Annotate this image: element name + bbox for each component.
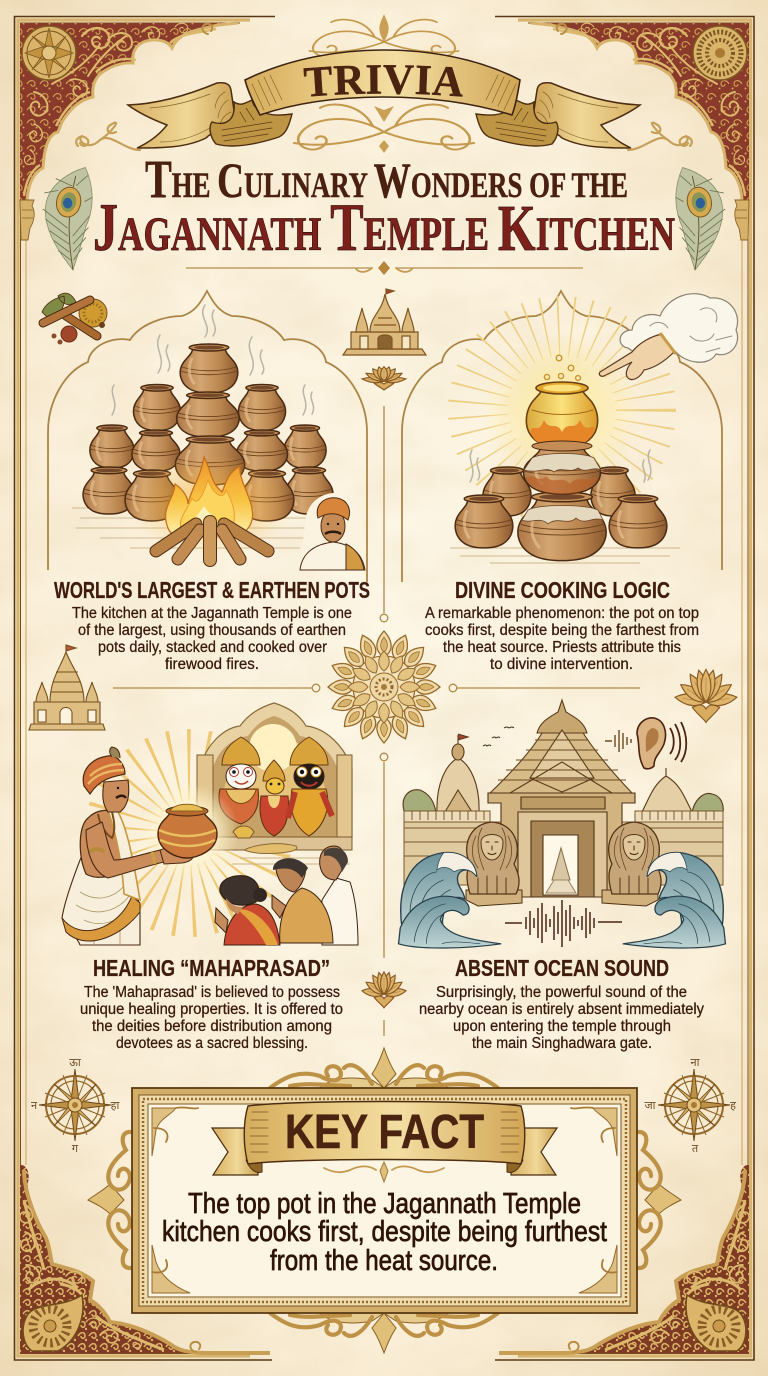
bottom pot (518, 492, 606, 561)
panel: divine cooking logic (450, 294, 738, 563)
glowing top pot (526, 382, 598, 451)
icon: temple left (29, 645, 105, 730)
icon: compass right: ह (730, 1099, 736, 1112)
text block: ocean sound (419, 984, 704, 1052)
central axis lines (113, 406, 640, 1036)
panel: absent ocean sound (399, 700, 725, 948)
right side scroll (639, 1132, 681, 1268)
firewood logs (156, 522, 268, 560)
title divider (186, 261, 583, 275)
text block: mahaprasad: The 'Mahaprasad' is believed to possess (84, 984, 340, 1001)
key fact text: kitchen cooks first, despite being furthest (162, 1216, 607, 1248)
left side scroll (88, 1132, 130, 1268)
text block: ocean sound: nearby ocean is entirely absent immediately (419, 1001, 704, 1018)
deities (219, 737, 332, 836)
key fact ornaments outside box (88, 1048, 681, 1353)
key fact text: The top pot in the Jagannath Temple (188, 1188, 581, 1220)
steam wisps (112, 305, 314, 415)
heading: world's largest: WORLD'S LARGEST & EARTHEN POTS (54, 577, 370, 603)
middle pot (524, 443, 601, 494)
icon: compass right: त (692, 1142, 699, 1155)
key fact text: from the heat source. (270, 1245, 498, 1277)
inner corner scrolls (152, 1107, 617, 1293)
devotees (215, 846, 358, 945)
text block: kitchen: firewood fires. (165, 656, 259, 673)
icon: compass right: ना (691, 1056, 700, 1069)
text block: ocean sound: the main Singhadwara gate. (472, 1035, 652, 1052)
ground hatch (450, 548, 680, 563)
stacked earthen pots (83, 344, 333, 521)
icon: compass right (644, 1056, 736, 1155)
text block: divine logic (425, 605, 699, 673)
box frame (132, 1088, 637, 1313)
key fact heading: KEY FACT (285, 1106, 484, 1159)
divine hand and cloud (599, 294, 738, 380)
temple spire (490, 700, 632, 793)
text block: divine logic: A remarkable phenomenon: the pot on top (425, 605, 699, 622)
title line 2: JAGANNATH TEMPLE KITCHEN (93, 189, 675, 265)
corner ornament: top right (531, 23, 749, 240)
bottom crest (270, 1313, 498, 1353)
small flourish under ribbon (324, 1162, 444, 1182)
icon: spices (42, 293, 107, 344)
steam wisps (470, 450, 651, 482)
mandala (328, 631, 440, 743)
text block: mahaprasad (80, 984, 343, 1052)
icon: peacock feather left (41, 167, 95, 271)
priest figure (62, 747, 193, 945)
icon: lotus top center (362, 366, 406, 390)
rays (478, 326, 646, 494)
text block: ocean sound: upon entering the temple through (453, 1018, 671, 1035)
corner ornament: top left (20, 23, 238, 240)
heading: absent ocean sound: ABSENT OCEAN SOUND (455, 955, 669, 981)
side pots (455, 467, 667, 548)
guardian lions (466, 822, 661, 906)
corner ornament: bottom left (17, 1165, 270, 1354)
icon: compass left: ऊा (69, 1056, 81, 1069)
text block: mahaprasad: unique healing properties. It is offered to (80, 1001, 343, 1018)
banner title text: TRIVIA (303, 65, 463, 97)
panel: key fact box (132, 1088, 637, 1313)
panel: world's largest pots (72, 305, 365, 570)
icon: compass left: ग (72, 1142, 79, 1155)
icon: compass left (31, 1056, 119, 1155)
key fact ribbon (212, 1102, 557, 1175)
offering food (232, 826, 350, 864)
shrine (197, 703, 352, 850)
text block: divine logic: the heat source. Priests attribute this (443, 639, 681, 656)
ocean waves (399, 852, 725, 948)
text block: kitchen: of the largest, using thousands of earthen (78, 622, 346, 639)
heading: healing mahaprasad: HEALING “MAHAPRASAD” (93, 955, 330, 981)
text block: kitchen: pots daily, stacked and cooked over (98, 639, 327, 656)
main title (93, 149, 675, 265)
icon: lotus right (674, 669, 738, 722)
icon: peacock feather right (673, 167, 727, 271)
gateway (488, 793, 635, 897)
text block: mahaprasad: devotees as a sacred blessing. (116, 1035, 308, 1052)
banner: TRIVIA (75, 49, 693, 152)
ground hatch (72, 508, 350, 548)
text block: mahaprasad: the deities before distribution among (92, 1018, 332, 1035)
key fact text (162, 1188, 607, 1277)
icon: ear and sound (605, 718, 686, 769)
bubbles (544, 355, 580, 380)
ornament below banner (294, 105, 474, 153)
ornament above banner (310, 14, 458, 56)
wall (404, 811, 723, 885)
sound waveform (505, 900, 622, 947)
icon: lotus lower center (362, 972, 406, 1008)
text block: kitchen: The kitchen at the Jagannath Temple is one (72, 605, 352, 622)
heading: divine cooking logic: DIVINE COOKING LOGIC (455, 577, 670, 603)
title line 1: THE CULINARY WONDERS OF THE (145, 149, 628, 209)
corner ornament: bottom right (499, 1165, 752, 1354)
panel arches (48, 291, 722, 582)
radiant rays (121, 765, 257, 901)
text block: divine logic: to divine intervention. (490, 656, 633, 673)
pot glow (139, 783, 239, 883)
panel: healing mahaprasad (62, 703, 358, 945)
fire (128, 455, 292, 555)
icon: compass right: जा (644, 1099, 656, 1112)
text block: kitchen (72, 605, 352, 673)
text block: ocean sound: Surprisingly, the powerful sound of the (436, 984, 687, 1001)
icon: temple center (343, 289, 426, 355)
text block: divine logic: cooks first, despite being the farthest from (425, 622, 699, 639)
cook portrait (300, 493, 365, 570)
icon: compass left: न (31, 1099, 38, 1112)
side towers (403, 734, 723, 812)
top crest (270, 1048, 498, 1088)
birds (483, 727, 514, 746)
banner main band (245, 50, 520, 115)
prasad pot (158, 804, 217, 858)
icon: compass left: हा (111, 1099, 119, 1112)
